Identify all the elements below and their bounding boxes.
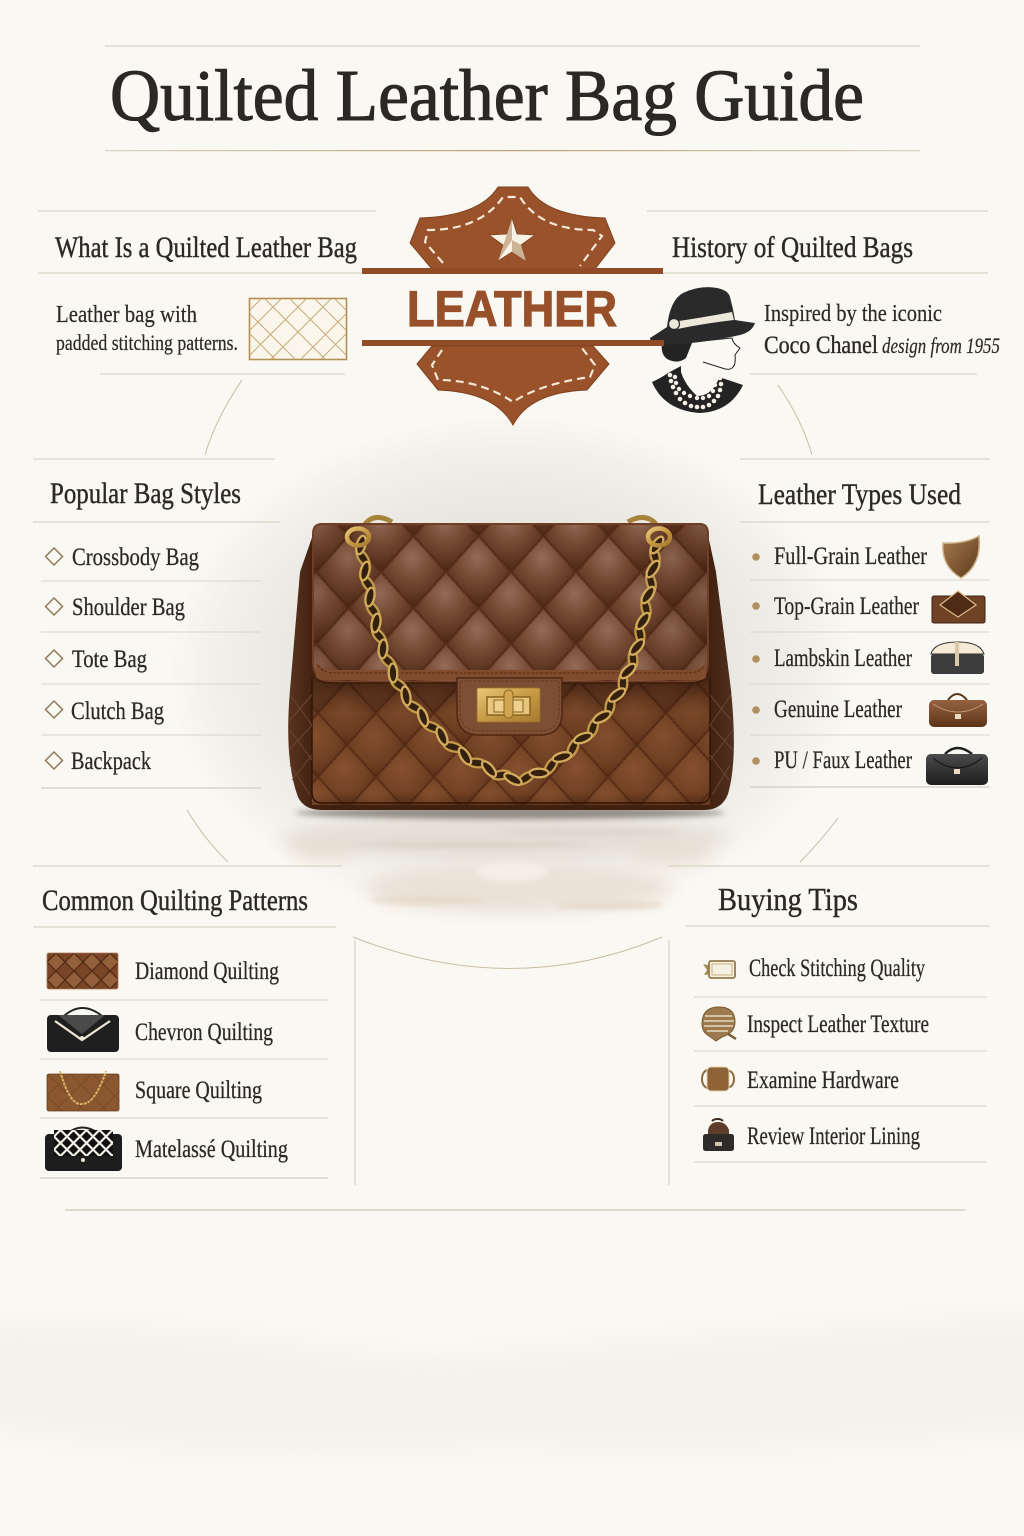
badge: top bar — [362, 268, 663, 274]
list item: full-grain leather: Full-Grain Leather — [774, 543, 928, 570]
icon: matelasse bag — [45, 1128, 122, 1171]
panel: history of quilted bags — [647, 211, 1000, 413]
list item: examine hardware — [702, 1067, 899, 1094]
list item: backpack: Backpack — [71, 748, 151, 775]
text: description: Leather bag with — [56, 302, 197, 328]
list item: lambskin leather: Lambskin Leather — [774, 645, 913, 672]
list item: chevron quilting — [47, 1008, 273, 1052]
icon: magnifier — [702, 1007, 736, 1041]
bag: lower quilted panel — [312, 678, 710, 805]
list item: top-grain leather: Top-Grain Leather — [774, 593, 920, 620]
panel: buying tips — [668, 866, 990, 1185]
floor: marble surface — [280, 807, 730, 912]
list item: review lining — [703, 1119, 920, 1151]
list item: inspect texture: Inspect Leather Texture — [747, 1011, 929, 1038]
badge: upper leather patch — [410, 187, 615, 269]
list item: tote bag: Tote Bag — [72, 646, 147, 673]
icon: diamond swatch — [47, 953, 118, 989]
list item: top-grain leather — [752, 591, 985, 623]
bag: panel edge seam — [312, 678, 710, 803]
icon: woman with hat and pearls — [650, 287, 755, 413]
panel: leather types used — [740, 459, 990, 787]
list item: square quilting — [47, 1071, 262, 1111]
heading: quilting patterns: Common Quilting Patterns — [42, 884, 308, 917]
footer divider — [65, 1209, 965, 1211]
text: history description — [764, 301, 1000, 359]
list item: full-grain leather — [752, 536, 979, 578]
bag: side quilting — [289, 695, 733, 795]
icon: two-tone bag — [931, 642, 984, 674]
list item: check stitching — [703, 955, 925, 982]
list item: clutch bag: Clutch Bag — [71, 698, 164, 725]
heading: popular bag styles: Popular Bag Styles — [50, 477, 241, 510]
text: description — [56, 302, 238, 355]
list item: shoulder bag: Shoulder Bag — [72, 594, 185, 621]
bag: front flap — [313, 524, 708, 683]
icon: stitched ribbon — [703, 961, 735, 978]
heading: buying tips: Buying Tips — [718, 881, 858, 917]
list item: lambskin leather — [752, 642, 984, 674]
panel: what is a quilted leather bag — [38, 211, 376, 374]
heading: what is: What Is a Quilted Leather Bag — [55, 231, 357, 264]
bag: chain eyelets — [347, 528, 670, 546]
list item: square quilting: Square Quilting — [135, 1077, 262, 1104]
list item: clutch bag — [46, 698, 164, 725]
list item: genuine leather: Genuine Leather — [774, 696, 903, 723]
list item: chevron quilting: Chevron Quilting — [135, 1019, 273, 1046]
list item: crossbody bag: Crossbody Bag — [72, 544, 199, 571]
icon: square quilted bag with chain — [47, 1071, 119, 1111]
circular arcs around the centre — [187, 380, 838, 968]
list item: diamond quilting — [47, 953, 279, 989]
text: history description: Coco Chanel — [764, 332, 878, 359]
list item: diamond quilting: Diamond Quilting — [135, 958, 279, 985]
text: history description: Inspired by the iconic — [764, 301, 942, 327]
icon: small backpack — [703, 1119, 734, 1151]
title: Quilted Leather Bag Guide — [110, 55, 864, 136]
list item: shoulder bag — [46, 594, 185, 621]
badge: lower bar — [362, 340, 664, 346]
list item: inspect texture — [702, 1007, 929, 1041]
icon: chevron bag — [47, 1008, 119, 1052]
list item: pu / faux leather: PU / Faux Leather — [774, 747, 913, 774]
bag: body silhouette — [288, 526, 734, 810]
list item: pu / faux leather — [752, 747, 988, 785]
badge: word LEATHER: LEATHER — [407, 281, 617, 337]
panel: popular bag styles — [33, 459, 280, 788]
list item: review lining: Review Interior Lining — [747, 1123, 920, 1150]
icon: hardware buckle — [702, 1067, 734, 1091]
icon: shield — [943, 536, 979, 578]
list item: genuine leather — [752, 694, 987, 727]
bag: gold turn lock — [477, 688, 540, 722]
badge: lower leather patch — [417, 346, 609, 425]
bag: chain strap — [361, 545, 657, 779]
icon: brown handbag — [929, 694, 987, 727]
main image: quilted leather bag — [280, 517, 734, 912]
list item: tote bag — [46, 646, 147, 673]
icon: black handbag — [926, 748, 988, 785]
list item: backpack — [46, 748, 151, 775]
icon: star — [489, 218, 535, 261]
icon: quilted swatch — [250, 298, 346, 360]
panel: common quilting patterns — [33, 866, 355, 1185]
list item: matelasse quilting — [45, 1128, 288, 1171]
icon: brown envelope bag — [932, 591, 985, 623]
heading: history: History of Quilted Bags — [672, 231, 913, 264]
list item: matelasse quilting: Matelassé Quilting — [135, 1136, 288, 1163]
list item: examine hardware: Examine Hardware — [747, 1067, 899, 1094]
list item: check stitching: Check Stitching Quality — [749, 955, 925, 982]
bag: back chain — [365, 517, 656, 524]
heading: leather types: Leather Types Used — [758, 478, 961, 511]
leather badge — [362, 187, 664, 425]
bag: lock tab — [457, 678, 562, 735]
text: description: padded stitching patterns. — [56, 330, 238, 355]
